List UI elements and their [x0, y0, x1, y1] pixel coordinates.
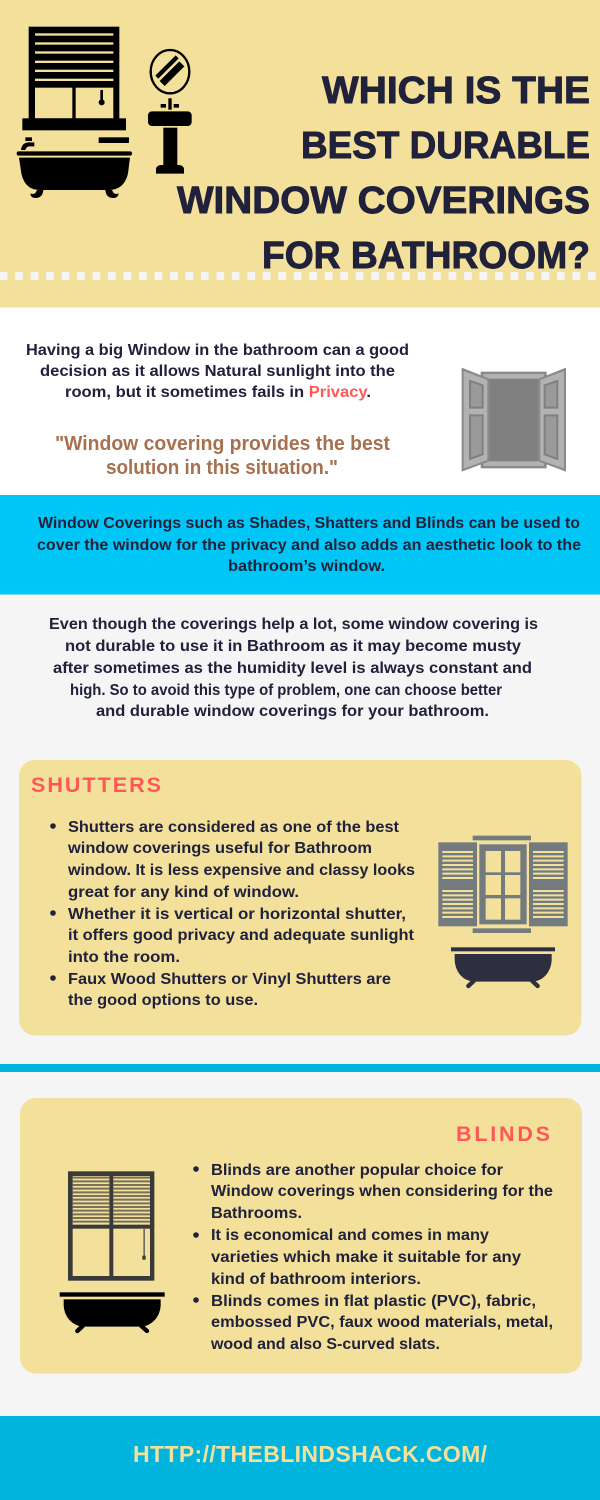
divider band — [0, 1064, 600, 1072]
footer — [0, 1416, 600, 1500]
bullet list: shutters: Whether it is vertical or horizontal shutter, — [68, 906, 406, 923]
text block: intro paragraph: room, but it sometimes fails in Privacy. — [65, 384, 371, 401]
bullet list: blinds: varieties which make it suitable for any — [211, 1249, 521, 1266]
text block: intro paragraph: Having a big Window in the bathroom can a good — [26, 342, 409, 359]
title: FOR BATHROOM? — [262, 235, 590, 277]
bullet list: blinds: kind of bathroom interiors. — [211, 1271, 421, 1288]
title: WHICH IS THE — [322, 70, 590, 112]
bullet list: shutters: it offers good privacy and adequate sunlight — [68, 927, 415, 944]
title — [177, 70, 590, 277]
panel: cyan band — [0, 495, 600, 594]
text block: intro paragraph — [26, 342, 409, 401]
icon: open window — [462, 368, 566, 472]
bullet list: blinds: Blinds comes in flat plastic (PVC), fabric, — [211, 1293, 536, 1310]
bullet list: blinds: Blinds are another popular choice for — [211, 1162, 503, 1179]
panel: cyan band: cover the window for the privacy and also adds an aesthetic look to the — [37, 537, 581, 554]
panel: cyan band: Window Coverings such as Shades, Shatters and Blinds can be used to — [38, 515, 580, 532]
title: WINDOW COVERINGS — [177, 180, 590, 222]
icon: shuttered window and bathtub — [438, 836, 568, 986]
bullet list: blinds: wood and also S-curved slats. — [210, 1336, 440, 1353]
panel: intro — [0, 308, 600, 495]
footer: HTTP://THEBLINDSHACK.COM/ — [133, 1441, 488, 1467]
text block: durability paragraph — [49, 616, 538, 720]
panel: shutters — [19, 760, 582, 1036]
text block: durability paragraph: after sometimes as the humidity level is always constant and — [53, 660, 532, 677]
bullet list: blinds — [193, 1162, 553, 1353]
title: BEST DURABLE — [301, 125, 590, 167]
text block: durability paragraph: Even though the coverings help a lot, some window covering is — [49, 616, 538, 633]
quote: "Window covering provides the best — [55, 433, 390, 455]
text block: durability paragraph: not durable to use it in Bathroom as it may become musty — [65, 638, 521, 655]
icon: window above bathtub — [17, 27, 132, 198]
panel: blinds — [20, 1098, 582, 1374]
bullet list: shutters — [50, 819, 415, 1009]
quote: solution in this situation." — [106, 457, 338, 479]
bullet list: blinds: embossed PVC, faux wood materials, metal, — [211, 1314, 553, 1331]
heading: blinds: BLINDS — [456, 1122, 550, 1146]
bullet list: shutters: window coverings useful for Bathroom — [67, 840, 372, 857]
bullet list: blinds: It is economical and comes in many — [211, 1227, 489, 1244]
icon: mirror and pedestal sink — [148, 50, 192, 174]
bullet list: shutters: the good options to use. — [68, 992, 258, 1009]
bullet list: blinds: Window coverings when considering for the — [211, 1183, 553, 1200]
heading: shutters: SHUTTERS — [31, 773, 161, 797]
icon: window blinds and bathtub — [60, 1171, 165, 1331]
bullet list: shutters: window. It is less expensive and classy looks — [67, 862, 415, 879]
text block: durability paragraph: and durable window coverings for your bathroom. — [96, 703, 489, 720]
header banner — [0, 0, 600, 308]
quote — [55, 433, 390, 479]
text block: durability paragraph: high. So to avoid this type of problem, one can choose better — [70, 682, 502, 699]
text block: intro paragraph: decision as it allows Natural sunlight into the — [40, 363, 395, 380]
bullet list: shutters: great for any kind of window. — [68, 884, 299, 901]
bullet list: shutters: Faux Wood Shutters or Vinyl Shutters are — [68, 971, 391, 988]
bullet list: shutters: into the room. — [68, 949, 180, 966]
bullet list: blinds: Bathrooms. — [211, 1205, 302, 1222]
bullet list: shutters: Shutters are considered as one of the best — [68, 819, 400, 836]
panel: cyan band: bathroom’s window. — [228, 558, 385, 575]
